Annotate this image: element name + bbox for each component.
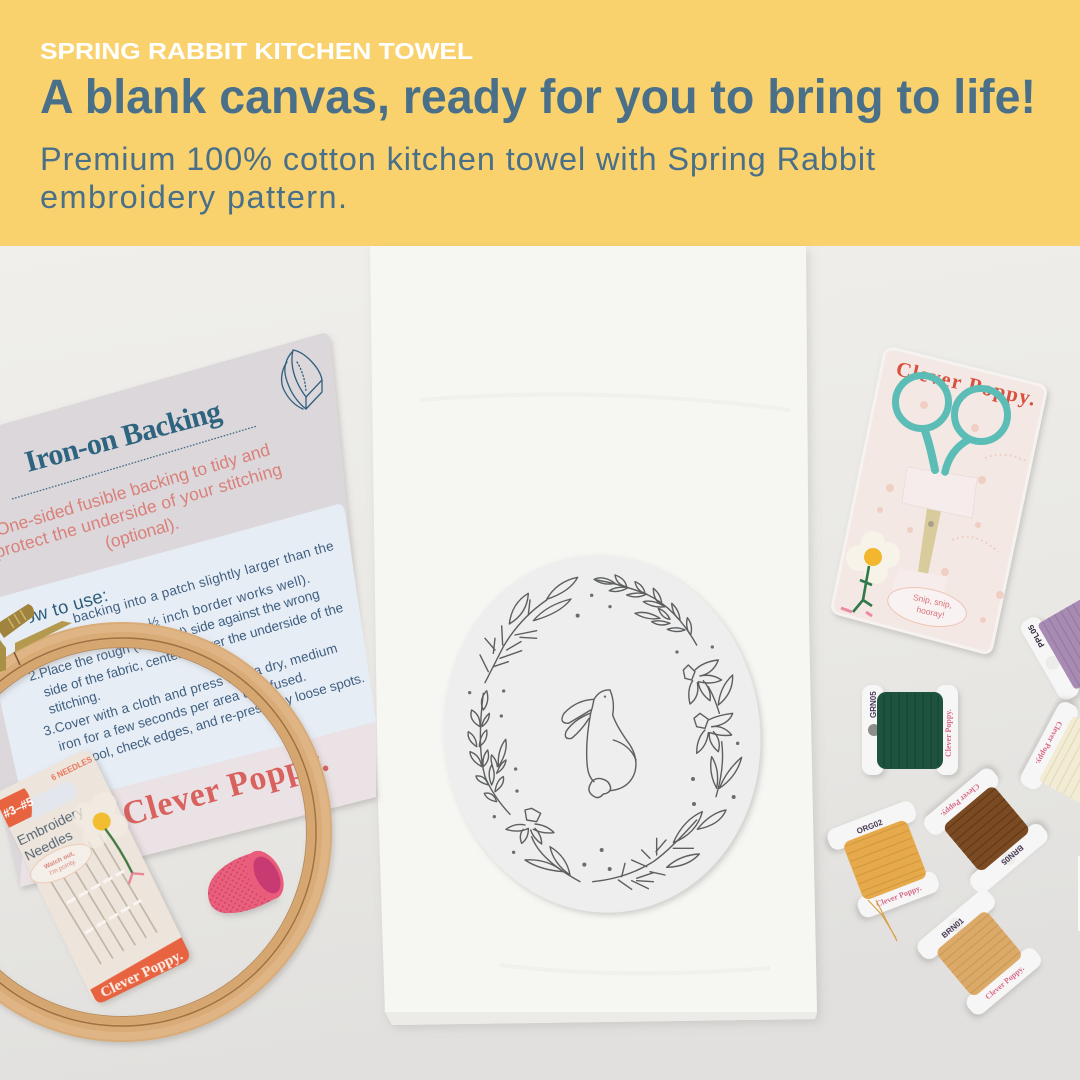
how to use heading: How to use: bbox=[8, 584, 110, 632]
card brand: Clever Poppy. bbox=[894, 356, 1038, 411]
bunny bbox=[562, 690, 636, 798]
bottom right lavender sprig bbox=[593, 810, 726, 889]
subtitle: Premium 100% cotton kitchen towel with Spring Rabbit bbox=[40, 141, 875, 177]
speech bubble: Snip, snip, bbox=[912, 592, 953, 610]
pack label: Needles bbox=[22, 827, 75, 864]
speech bubble: hooray! bbox=[916, 604, 946, 620]
subtitle bbox=[40, 141, 875, 215]
thread card: orange ORG02: Clever Poppy. bbox=[875, 883, 923, 909]
thread card: cream: Clever Poppy. bbox=[1034, 720, 1064, 766]
thread card: tan BRN01 bbox=[914, 887, 1046, 1019]
pack hole bbox=[15, 779, 80, 824]
thimble bbox=[208, 845, 291, 913]
embroidery hoop bbox=[0, 604, 326, 1036]
paper band lower bbox=[892, 568, 947, 600]
edge of white item at far right bbox=[1078, 856, 1080, 931]
subtitle: embroidery pattern. bbox=[40, 179, 347, 215]
folded kitchen towel bbox=[370, 246, 817, 1025]
needles bbox=[40, 830, 159, 969]
instructions: side of the fabric, centered over the underside of the bbox=[42, 600, 345, 700]
thread card: purple PPL05 bbox=[1018, 582, 1080, 703]
orange loose thread bbox=[868, 900, 897, 941]
pack label: Embroidery bbox=[14, 803, 86, 848]
needle pack bbox=[0, 747, 194, 1007]
decorative dots bbox=[468, 594, 739, 871]
instructions: cool, check edges, and re-press any loose spots. bbox=[84, 670, 366, 766]
needle pack: Clever Poppy. bbox=[98, 947, 186, 1001]
embroidery wreath bbox=[468, 575, 742, 889]
instructions: stitching. bbox=[47, 688, 102, 717]
card title: Iron-on Backing bbox=[21, 395, 225, 479]
card logo: Clever Poppy. bbox=[118, 741, 332, 834]
top right sprig bbox=[594, 575, 697, 645]
instructions: iron for a few seconds per area until fused. bbox=[57, 669, 308, 754]
instructions: 2.Place the rough (textured) side against the wrong bbox=[27, 586, 321, 684]
thread card: purple PPL05: PPL05 bbox=[1026, 623, 1046, 649]
needle pack: #3–#5 bbox=[2, 796, 36, 821]
speech bubble: Watch out, bbox=[43, 850, 76, 871]
scissor blade bbox=[918, 508, 941, 574]
thread card: brown BRN05 bbox=[919, 764, 1051, 896]
speech bubble bbox=[884, 581, 970, 633]
salmon description: protect the underside of your stitching bbox=[0, 459, 284, 562]
hoop brass screw bbox=[0, 604, 72, 672]
instructions: 1.Cut the backing into a patch slightly larger than the bbox=[12, 538, 335, 643]
salmon description: One-sided fusible backing to tidy and bbox=[0, 439, 272, 540]
thread card: dark green GRN05: Clever Poppy. bbox=[944, 709, 953, 757]
speech bubble: I'm pointy. bbox=[48, 858, 78, 877]
background table surface bbox=[0, 245, 1080, 1080]
paper band upper bbox=[902, 467, 977, 518]
card pattern bbox=[877, 401, 1028, 623]
needle tape bbox=[65, 870, 143, 934]
banner bbox=[0, 0, 1080, 246]
right daffodils bbox=[683, 660, 742, 797]
icon: iron bbox=[282, 350, 322, 409]
thread card: dark green GRN05: GRN05 bbox=[869, 691, 878, 718]
pack label bbox=[14, 803, 93, 864]
top left lavender sprig bbox=[480, 577, 578, 683]
instructions bbox=[12, 538, 366, 766]
hoop notch bbox=[14, 652, 20, 665]
main title: A blank canvas, ready for you to bring to life! bbox=[40, 70, 1036, 124]
scissor handles bbox=[896, 376, 1008, 472]
instructions: fabric design, a ½ inch border works well). bbox=[47, 571, 312, 659]
thread card: cream bbox=[1018, 699, 1080, 823]
speech bubble bbox=[25, 837, 97, 891]
scissors card bbox=[833, 349, 1045, 652]
thread card: tan BRN01: Clever Poppy. bbox=[983, 964, 1026, 1001]
dotted rule bbox=[12, 426, 257, 499]
size tag bbox=[0, 788, 38, 828]
thread card: dark green GRN05 bbox=[862, 685, 958, 775]
iron-on backing card bbox=[0, 333, 376, 887]
thread card: orange ORG02 bbox=[825, 799, 945, 921]
flower character bbox=[841, 531, 900, 616]
instruction panel bbox=[0, 504, 376, 812]
bottom daffodil bbox=[506, 808, 580, 882]
thread card: tan BRN01: BRN01 bbox=[940, 916, 966, 940]
footer band bbox=[20, 722, 376, 887]
needle count: 6 NEEDLES bbox=[50, 755, 94, 783]
eyebrow heading: SPRING RABBIT KITCHEN TOWEL bbox=[40, 38, 473, 64]
paper circle with bunny wreath pattern bbox=[421, 535, 783, 933]
thread card: brown BRN05: Clever Poppy. bbox=[939, 782, 982, 819]
thread card: orange ORG02: ORG02 bbox=[855, 818, 884, 836]
thread card: brown BRN05: BRN05 bbox=[999, 843, 1025, 867]
flower character bbox=[67, 787, 152, 894]
instructions: 3.Cover with a cloth and press with a dry, medium bbox=[42, 640, 339, 739]
salmon description: (optional). bbox=[103, 513, 181, 553]
left sprig bbox=[468, 691, 510, 814]
pack logo band bbox=[87, 937, 192, 1005]
